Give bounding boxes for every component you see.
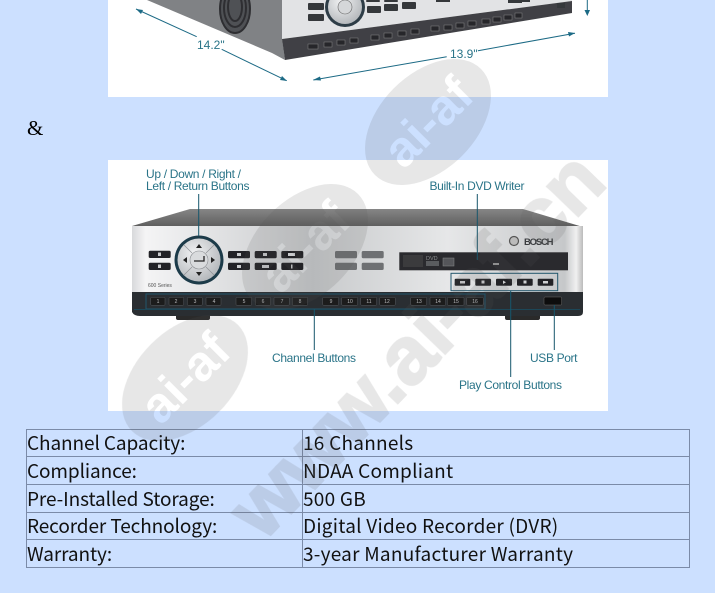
specification table: Pre-Installed Storage: [27,484,215,512]
feet [176,314,540,320]
channel buttons group: 14 [435,299,441,305]
channel buttons group: 12 [384,299,390,305]
top DVR device [147,0,572,60]
specification table: Compliance: [27,456,137,484]
dark bottom band [132,292,583,316]
channel buttons group: 7 [281,299,284,305]
device lid [132,209,583,227]
watermark text: www.ai-af.cn [210,134,622,556]
dimension arrow: height [584,0,590,16]
specification table: Channel Capacity: [27,430,185,456]
grey panel buttons [335,251,384,270]
channel buttons group: 4 [213,299,216,305]
specification table: Recorder Technology: [27,512,217,539]
watermark badges [122,59,491,441]
dimension arrow: width 13.9 inches [313,32,575,80]
channel buttons group: 2 [175,299,178,305]
channel buttons group: 10 [347,299,353,305]
dimension arrow: depth 14.2 inches [136,9,287,81]
navigation dial [174,236,224,284]
specification table: 500 GB [303,484,366,512]
ampersand separator: & [27,116,43,140]
label: navigation buttons: Up / Down / Right / [146,167,242,181]
series label: 600 Series [148,283,172,289]
label: DVD writer: Built-In DVD Writer [430,179,524,193]
label: play control buttons: Play Control Buttons [459,378,562,392]
watermark overlay [122,59,607,536]
channel buttons group: 8 [299,299,302,305]
dimension arrow: width 13.9 inches: 13.9" [450,47,478,61]
specification table: 3-year Manufacturer Warranty [303,540,573,566]
channel buttons group [134,294,580,310]
specification table: Digital Video Recorder (DVR) [303,512,558,539]
channel buttons on top device [308,13,522,49]
front view product photo panel [108,160,608,411]
top panel buttons [308,0,565,21]
dimension arrow: depth 14.2 inches: 14.2" [197,38,225,52]
channel buttons group: 5 [243,299,246,305]
channel buttons group: 6 [262,299,265,305]
specification table: NDAA Compliant [303,456,453,484]
channel buttons group: 15 [453,299,459,305]
label: navigation buttons line two: Left / Return Buttons [146,179,250,193]
leader lines [199,194,554,377]
icon: cooling fan [220,0,250,33]
label: channel buttons: Channel Buttons [272,351,356,365]
dark panel buttons [149,251,303,270]
DVD tray [399,252,568,270]
DVD tray: DVD [426,256,438,262]
BOSCH logo [510,236,554,248]
BOSCH logo: BOSCH [524,237,554,248]
label: USB port: USB Port [530,351,578,365]
silver front panel [132,226,583,292]
channel buttons group: 9 [330,299,333,305]
front DVR device [132,209,583,320]
USB port [544,297,562,305]
channel buttons group: 16 [472,299,478,305]
control dial [325,0,365,27]
specification table: 16 Channels [303,430,413,456]
channel buttons group: 13 [416,299,422,305]
specification table: Warranty: [27,540,112,566]
specification table [26,429,690,568]
channel buttons group: 1 [157,299,160,305]
channel buttons group: 3 [194,299,197,305]
dark button glyphs [158,252,295,268]
channel buttons group: 11 [366,299,372,305]
play control buttons [451,273,558,291]
